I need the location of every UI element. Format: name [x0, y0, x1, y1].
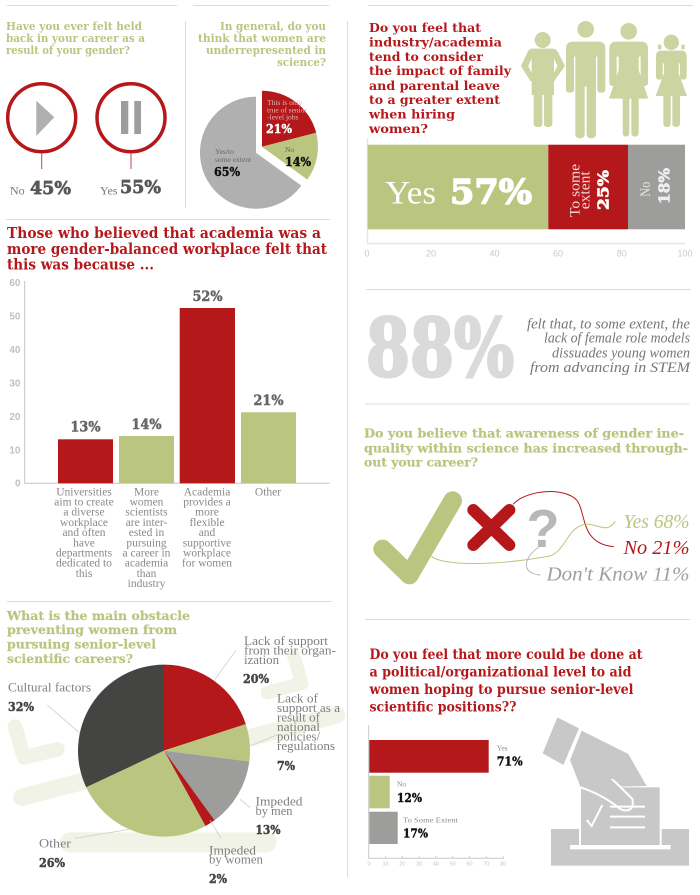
bar chart: yes no to some extent: 50 — [450, 862, 456, 868]
pie chart: underrepresentation: some extent — [215, 155, 252, 164]
bar chart: yes no to some extent: 12% — [397, 790, 422, 805]
pie chart: underrepresentation: 14% — [285, 155, 312, 169]
bar chart: reasons: 10 — [9, 446, 21, 456]
bar chart: reasons: departments — [56, 548, 113, 560]
bar chart: yes no to some extent: No — [397, 780, 406, 789]
bar chart: reasons: a career in — [123, 548, 171, 560]
panel: underrepresented pie — [198, 20, 326, 209]
icon: play button — [8, 84, 76, 169]
label: impeded by men 13%: 13% — [256, 823, 281, 837]
heading: underrepresented question: science? — [277, 56, 326, 69]
heading: obstacle question: pursuing senior-level — [7, 637, 156, 652]
label: national policies 7%: national — [277, 720, 321, 734]
heading: awareness question: quality within science has increased through- — [364, 440, 688, 455]
callout: 88% role models: felt that, to some extent, the — [527, 316, 691, 332]
label: other 26%: 26% — [39, 856, 66, 870]
bar chart: reasons: ested in — [129, 527, 164, 539]
panel: gender-balanced academia — [7, 225, 330, 590]
heading: awareness question: out your career? — [364, 455, 478, 470]
icon: hand casting ballot — [543, 717, 689, 866]
panel: held back by gender — [6, 20, 165, 199]
label: cultural factors 32% — [8, 681, 91, 714]
heading: parental leave question — [368, 20, 512, 136]
bar chart: reasons: academia — [125, 558, 168, 570]
stacked bar chart: yes to some extent no: 60 — [553, 248, 563, 258]
background: faded check mark — [15, 657, 337, 842]
heading: academia bar chart title: more gender-balanced workplace felt that — [7, 241, 327, 258]
label: impeded by men 13% — [256, 795, 303, 837]
stacked bar chart: yes to some extent no: 25% — [594, 170, 612, 210]
heading: underrepresented question: In general, do you — [220, 20, 326, 33]
bar chart: reasons: are inter- — [126, 517, 167, 529]
pie chart: underrepresentation: 65% — [214, 165, 241, 179]
bar chart: yes no to some extent: 10 — [382, 862, 389, 868]
bar chart: reasons: aim to create — [54, 496, 114, 508]
label: impeded by women 2%: Impeded — [209, 843, 257, 857]
label: national policies 7%: support as a — [277, 701, 340, 715]
bar chart: yes no to some extent: 30 — [416, 862, 422, 868]
bar chart: yes no to some extent: 40 — [433, 862, 439, 868]
legend: yes no don't know: Don't Know 11% — [545, 564, 690, 586]
label: cultural factors 32%: 32% — [8, 700, 35, 714]
bar chart: reasons: 21% — [254, 393, 284, 409]
bar chart: reasons: workplace — [60, 517, 108, 529]
stacked bar chart: yes to some extent no: 100 — [677, 248, 693, 258]
label: impeded by women 2%: 2% — [209, 872, 228, 886]
callout: 88% role models: 88% — [366, 301, 514, 395]
label: lack of support from organization 20%: Lack of support — [244, 634, 329, 648]
heading: parental leave question: and parental leave — [369, 78, 500, 93]
heading: obstacle question: What is the main obstacle — [6, 608, 190, 623]
callout: 88% role models — [366, 301, 691, 395]
panel: family and parental leave — [364, 20, 693, 258]
label: no 45%: 45% — [30, 178, 71, 199]
bar chart: reasons: a diverse — [63, 507, 105, 519]
label: impeded by men 13%: by men — [256, 804, 293, 818]
stacked bar chart: yes to some extent no — [364, 138, 693, 258]
pie chart: underrepresentation — [200, 91, 318, 209]
bar chart: reasons: pursuing — [126, 537, 167, 549]
pie chart: underrepresentation: No — [285, 145, 294, 154]
bar chart: reasons: industry — [128, 578, 166, 590]
bar chart: reasons: for women — [182, 558, 232, 570]
bar chart: yes no to some extent: 71% — [497, 753, 523, 768]
bar chart: reasons: Other — [255, 486, 281, 498]
stacked bar chart: yes to some extent no: To some — [567, 164, 583, 217]
panel: main obstacle — [6, 608, 340, 886]
bar chart: reasons: Universities — [56, 486, 112, 498]
heading: academia bar chart title: this was because ... — [7, 256, 154, 274]
bar chart: reasons: 20 — [9, 412, 21, 423]
heading: held back question: Have you ever felt held — [6, 20, 142, 33]
heading: parental leave question: Do you feel that — [369, 20, 481, 35]
stacked bar chart: yes to some extent no: extent — [577, 170, 593, 209]
label: cultural factors 32%: Cultural factors — [8, 681, 91, 695]
bar chart: reasons: have — [73, 537, 95, 549]
heading: political question: women hoping to pursue senior-level — [369, 682, 634, 698]
callout: 88% role models: from advancing in STEM — [530, 360, 691, 376]
heading: underrepresented question — [198, 20, 326, 69]
label: national policies 7%: 7% — [277, 759, 296, 773]
bar chart: reasons: this — [76, 568, 93, 580]
label: no 45% — [10, 178, 71, 199]
bar chart: yes no to some extent: 17% — [403, 825, 428, 840]
label: yes 55% — [100, 177, 161, 198]
heading: parental leave question: the impact of family — [369, 63, 512, 78]
bar chart: reasons: More — [134, 486, 159, 498]
heading: held back question: back in your career as a — [6, 32, 145, 45]
heading: political question — [369, 647, 643, 715]
bar chart: reasons: Academia — [184, 486, 230, 498]
bar chart: reasons: workplace — [183, 548, 231, 560]
label: national policies 7%: policies/ — [277, 730, 321, 744]
label: national policies 7%: result of — [277, 711, 321, 725]
bar chart: reasons: 52% — [192, 289, 222, 305]
label: lack of support from organization 20%: 20% — [243, 672, 270, 686]
label: impeded by men 13%: Impeded — [256, 795, 303, 809]
stacked bar chart: yes to some extent no: 18% — [655, 168, 673, 204]
heading: parental leave question: women? — [368, 121, 428, 136]
heading: parental leave question: tend to consider — [369, 49, 483, 64]
bar chart: yes no to some extent: 20 — [399, 862, 405, 868]
callout: 88% role models: dissuades young women — [552, 345, 690, 361]
stacked bar chart: yes to some extent no: 40 — [489, 248, 500, 258]
stacked bar chart: yes to some extent no: No — [638, 182, 654, 197]
heading: obstacle question: scientific careers? — [7, 651, 133, 666]
heading: awareness question: Do you believe that awareness of gender ine- — [364, 426, 684, 441]
label: national policies 7% — [277, 692, 340, 773]
label: other 26% — [39, 837, 72, 870]
legend: yes no don't know — [545, 511, 690, 586]
bar chart: reasons: 0 — [15, 479, 21, 490]
heading: awareness question — [364, 426, 688, 470]
label: lack of support from organization 20% — [243, 634, 336, 686]
heading: underrepresented question: underrepresented in — [206, 44, 326, 57]
bar chart: reasons: more — [195, 507, 219, 519]
heading: parental leave question: industry/academia — [369, 34, 502, 50]
callout: 88% role models: lack of female role models — [544, 331, 690, 347]
stacked bar chart: yes to some extent no: 0 — [364, 248, 370, 258]
heading: political question: Do you feel that more could be done at — [370, 647, 643, 663]
bar chart: yes no to some extent: Yes — [497, 744, 508, 753]
legend: yes no don't know: Yes 68% — [624, 511, 690, 533]
heading: obstacle question — [6, 608, 190, 666]
bar chart: reasons: 14% — [132, 417, 162, 433]
heading: underrepresented question: think that women are — [198, 32, 326, 45]
label: national policies 7%: Lack of — [277, 692, 319, 706]
label: impeded by women 2%: by women — [209, 853, 264, 867]
bar chart: reasons: 40 — [9, 345, 21, 356]
heading: parental leave question: to a greater extent — [369, 92, 500, 107]
bar chart: yes no to some extent: 0 — [367, 862, 371, 868]
bar chart: yes no to some extent — [367, 725, 523, 868]
stacked bar chart: yes to some extent no: 80 — [617, 248, 627, 258]
legend: yes no don't know: No 21% — [622, 537, 690, 559]
bar chart: reasons: and often — [62, 527, 106, 539]
bar chart: reasons: provides a — [183, 496, 231, 508]
bar chart: reasons: than — [137, 568, 157, 580]
icon: family silhouettes — [521, 21, 687, 138]
heading: parental leave question: when hiring — [368, 106, 455, 122]
bar chart: reasons: 30 — [9, 379, 21, 390]
bar chart: reasons: 13% — [70, 420, 100, 436]
bar chart: reasons: 50 — [9, 312, 21, 322]
label: other 26%: Other — [39, 837, 72, 851]
bar chart: reasons: flexible — [189, 517, 225, 529]
bar chart: yes no to some extent: 60 — [466, 862, 473, 868]
icon: pause button — [97, 84, 165, 169]
label: no 45%: No — [10, 184, 25, 198]
bar chart: reasons: dedicated to — [56, 558, 112, 570]
bar chart: reasons: scientists — [125, 507, 168, 519]
heading: held back question: result of your gender? — [6, 44, 130, 57]
heading: obstacle question: preventing women from — [7, 622, 177, 637]
heading: academia bar chart title: Those who believed that academia was a — [7, 225, 322, 242]
pie chart: underrepresentation: -level jobs — [267, 112, 299, 122]
pie chart: underrepresentation: true of senior — [267, 106, 307, 114]
label: national policies 7%: regulations — [277, 739, 335, 753]
pie chart: underrepresentation: Yes/to — [215, 147, 234, 156]
label: lack of support from organization 20%: from their organ- — [244, 644, 336, 658]
heading: political question: scientific positions?? — [370, 699, 516, 715]
bar chart: reasons: 60 — [9, 278, 21, 289]
bar chart: yes no to some extent: 70 — [483, 862, 489, 868]
bar chart: reasons: women — [130, 496, 164, 508]
bar chart: yes no to some extent: 80 — [500, 862, 506, 868]
bar chart: reasons: supportive — [183, 537, 231, 549]
bar chart: yes no to some extent: To Some Extent — [403, 815, 459, 824]
bar chart: reasons: and — [199, 527, 216, 539]
heading: political question: a political/organizational level to aid — [370, 665, 632, 681]
label: lack of support from organization 20%: ization — [244, 653, 280, 667]
heading: academia bar chart title — [7, 225, 327, 274]
icons: check cross question mark with connectors — [383, 492, 615, 575]
label: yes 55%: 55% — [120, 177, 161, 198]
pie chart: obstacles — [47, 651, 277, 838]
panel: political and organizational level — [367, 647, 689, 868]
panel: awareness of inequality — [364, 426, 690, 586]
label: impeded by women 2% — [209, 843, 264, 886]
stacked bar chart: yes to some extent no: Yes — [385, 175, 436, 211]
bar chart: reasons — [9, 278, 330, 590]
label: yes 55%: Yes — [100, 184, 118, 198]
stacked bar chart: yes to some extent no: 57% — [450, 172, 532, 212]
heading: held back question — [6, 20, 145, 57]
pie chart: underrepresentation: 21% — [266, 122, 293, 136]
stacked bar chart: yes to some extent no: 20 — [426, 248, 436, 258]
pie chart: underrepresentation: This is only — [267, 98, 303, 107]
icons: check cross question mark with connectors: ? — [526, 499, 560, 559]
